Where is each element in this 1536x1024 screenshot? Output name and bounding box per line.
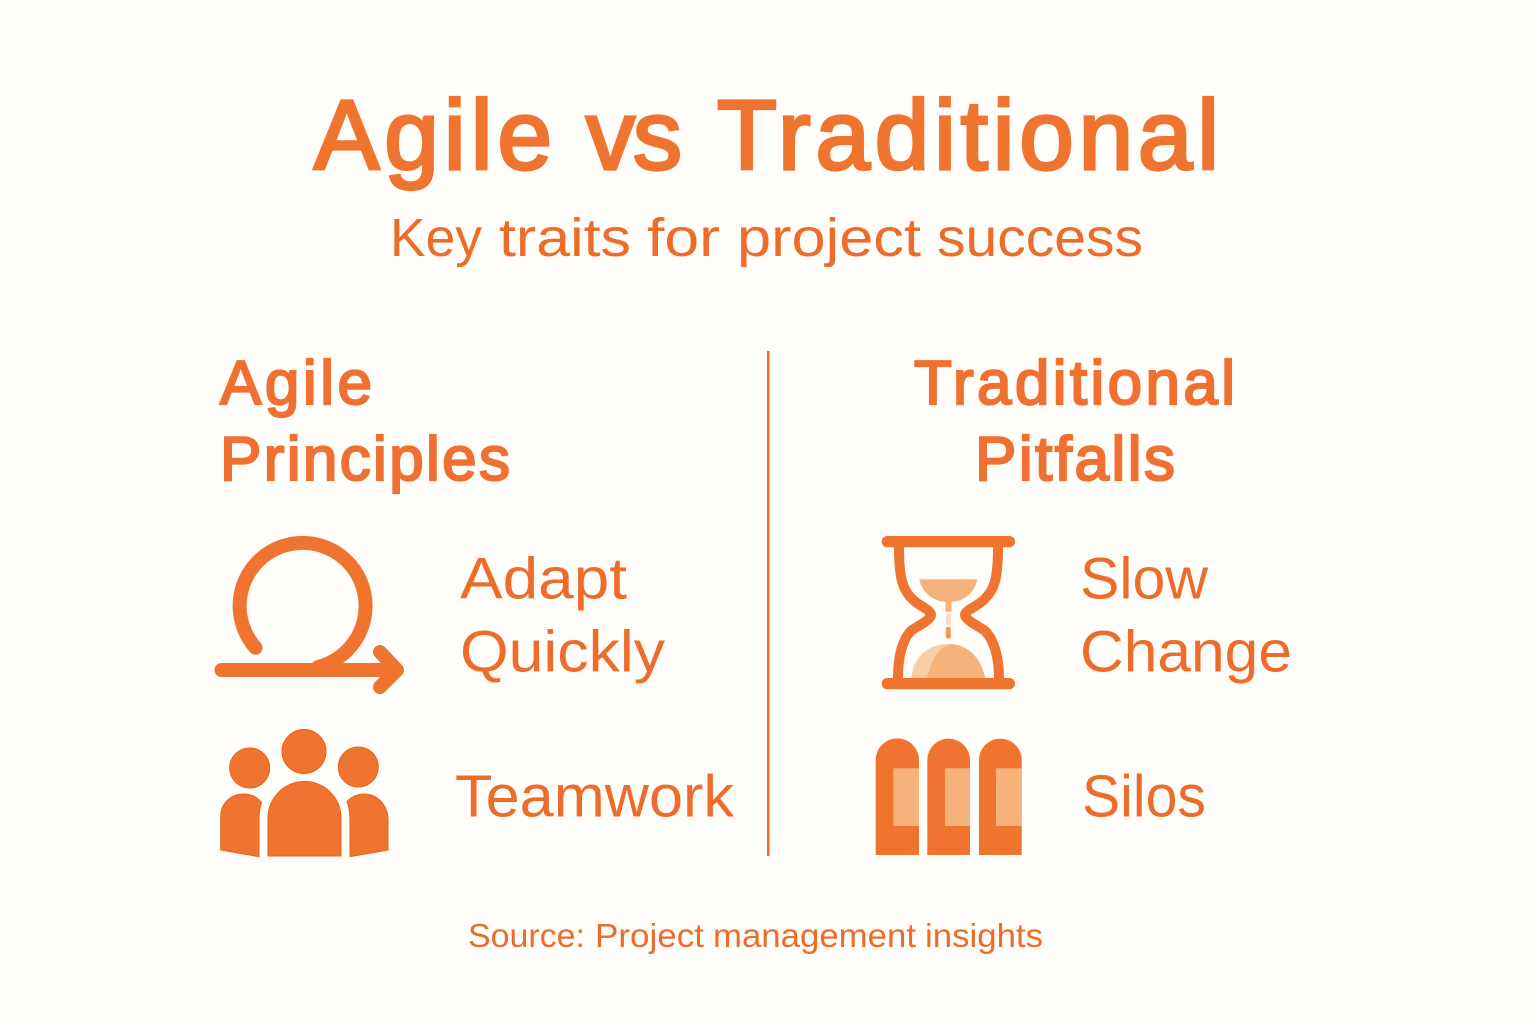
label: adapt quickly: Adapt xyxy=(460,547,627,612)
source note: insights xyxy=(925,917,1043,954)
label: teamwork: Teamwork xyxy=(455,764,735,830)
title xyxy=(314,80,1219,190)
subtitle: for xyxy=(647,208,720,268)
title: vs xyxy=(586,80,682,190)
label: slow change: Change xyxy=(1080,620,1292,685)
label: adapt quickly xyxy=(460,547,665,685)
source note xyxy=(468,917,1043,954)
header xyxy=(314,80,1219,268)
subtitle: Key xyxy=(390,208,482,268)
label: slow change: Slow xyxy=(1080,547,1209,612)
source note: management xyxy=(713,917,916,954)
heading: agile principles: Principles xyxy=(220,425,510,494)
label: adapt quickly: Quickly xyxy=(460,620,665,685)
title: Agile xyxy=(314,80,552,190)
title: Traditional xyxy=(717,80,1219,190)
subtitle: success xyxy=(937,208,1143,268)
heading: agile principles xyxy=(220,349,510,494)
icon: team xyxy=(221,730,388,857)
panel: agile principles xyxy=(220,349,735,857)
subtitle: project xyxy=(737,208,921,268)
divider xyxy=(767,351,770,856)
source note: Project xyxy=(595,917,704,954)
icon: hourglass xyxy=(882,536,1015,689)
heading: traditional pitfalls: Traditional xyxy=(914,349,1235,418)
icon: silos xyxy=(876,738,1022,855)
subtitle xyxy=(390,208,1143,268)
label: slow change xyxy=(1080,547,1292,685)
panel: traditional pitfalls xyxy=(876,349,1292,855)
subtitle: traits xyxy=(499,208,631,268)
label: silos: Silos xyxy=(1082,764,1206,830)
source note: Source: xyxy=(468,917,585,954)
heading: traditional pitfalls: Pitfalls xyxy=(975,425,1175,494)
heading: agile principles: Agile xyxy=(220,349,372,418)
heading: traditional pitfalls xyxy=(914,349,1235,494)
icon: loop arrow xyxy=(222,543,397,687)
